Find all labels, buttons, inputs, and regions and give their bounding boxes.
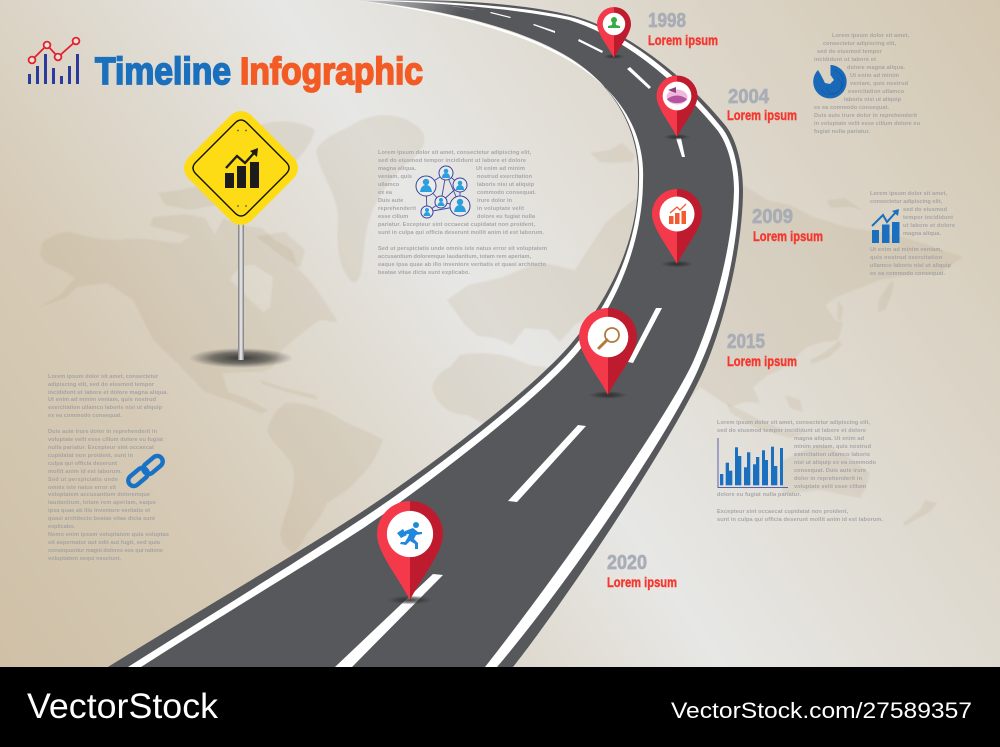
text block: top right: sed do eiusmod tempor [817, 49, 883, 55]
text block: centre: laboris nisi ut aliquip [477, 182, 535, 188]
text block: lower right: minim veniam, quis nostrud [794, 444, 872, 450]
text block: lower right: Lorem ipsum dolor sit amet, consectetur adipiscing elit, [717, 420, 870, 426]
sign shadow [189, 348, 293, 368]
text block: left: Lorem ipsum dolor sit amet, consectetur [48, 374, 159, 380]
label 2015: 2015 [727, 331, 765, 353]
text block: left: explicabo. [48, 524, 75, 530]
text block: right: consectetur adipiscing elit, [870, 199, 942, 205]
footer bar: VectorStock.com/27589357 [671, 698, 972, 723]
icon: people network [416, 166, 470, 218]
text block: lower right: sunt in culpa qui officia deserunt mollit anim id est laborum. [717, 517, 883, 523]
text block: right: Ut enim ad minim veniam, [870, 247, 942, 253]
text block: left: consequuntur magni dolores eos qui ratione [48, 548, 163, 554]
map: north america [40, 214, 338, 414]
text block: right: ut labore et dolore [903, 223, 955, 229]
road surface [108, 0, 743, 667]
text block: centre: nostrud exercitation [477, 174, 533, 180]
text block: top right: fugiat nulla pariatur. [814, 129, 870, 135]
pin 2009 [652, 189, 702, 268]
text block: lower right: sed do eiusmod tempor incididunt ut labore et dolore [717, 428, 866, 434]
text block: left: exercitation ullamco laboris nisi ut aliquip [48, 405, 163, 411]
text block: centre [378, 150, 547, 276]
label 2004: Lorem ipsum [727, 107, 797, 123]
text block: left: Sed ut perspiciatis unde [48, 477, 118, 483]
title: Timeline [95, 51, 231, 93]
text block: centre: ullamco [378, 182, 400, 188]
road right edge line [352, 0, 739, 667]
label 2009: Lorem ipsum [753, 228, 823, 244]
text block: centre: pariatur. Excepteur sint occaecat cupidatat non proident, [378, 222, 535, 228]
text block: top right: dolore magna aliqua. [847, 65, 905, 71]
text block: left: voluptatem accusantium doloremque [48, 492, 150, 498]
text block: top right: ex ea commodo consequat. [814, 105, 889, 111]
text block: right: Lorem ipsum dolor sit amet, [870, 191, 947, 197]
text block: left: Ut enim ad minim veniam, quis nostrud [48, 397, 157, 403]
text block: left: nulla pariatur. Excepteur sint occaecat [48, 445, 154, 451]
text block: centre: Ut enim ad minim [476, 166, 525, 172]
sign board [184, 111, 298, 225]
road [108, 0, 743, 667]
text block: centre: Sed ut perspiciatis unde omnis iste natus error sit voluptatem [378, 246, 547, 252]
icon: donut chart [813, 65, 847, 98]
pin 2015 [579, 308, 637, 399]
text block: left: culpa qui officia deserunt [48, 461, 117, 467]
text block: left: ipsa quae ab illo inventore veritatis et [48, 508, 150, 514]
logo: chart with line [28, 38, 79, 84]
text block: top right: veniam, quis nostrud [850, 81, 909, 87]
text block: centre: accusantium doloremque laudantium, totam rem aperiam, [378, 254, 531, 260]
icon: running businessman [397, 522, 422, 549]
pin 1998 [597, 7, 631, 59]
text block: right: sed do eiusmod [903, 207, 948, 213]
text block: right: magna aliqua. [903, 231, 941, 237]
text block: left: omnis iste natus error sit [48, 485, 116, 491]
map: scandinavia [590, 143, 635, 163]
text block: left: Nemo enim ipsam voluptatem quia voluptas [48, 532, 169, 538]
text block: left: voluptate velit esse cillum dolore eu fugiat [48, 437, 163, 443]
text block: top right: exercitation ullamco [848, 89, 905, 95]
label 2020: Lorem ipsum [607, 574, 677, 590]
text block: right [870, 191, 955, 277]
label 2015 [727, 331, 797, 369]
text block: right: ex ea commodo consequat. [870, 271, 945, 277]
text block: top right: Lorem ipsum dolor sit amet, [832, 33, 909, 39]
text block: top right: consectetur adipiscing elit, [823, 41, 896, 47]
road centre dashes [335, 6, 685, 667]
map: arctic islands [158, 121, 315, 268]
text block: left: voluptatem sequi nesciunt. [48, 556, 121, 562]
map: south america [267, 403, 383, 553]
label 2009: 2009 [752, 206, 793, 228]
road sign [184, 111, 298, 368]
text block: left: mollit anim id est laborum. [48, 469, 122, 475]
text block: centre: ex ea [378, 190, 393, 196]
text block: centre: irure dolor in [477, 198, 513, 204]
text block: left: sit aspernatur aut odit aut fugit, sed quia [48, 540, 161, 546]
text block: centre: in voluptate velit [477, 206, 524, 212]
text block: right: tempor incididunt [903, 215, 953, 221]
map: australia [780, 445, 870, 498]
map: pacific islands [727, 198, 863, 438]
text block: centre: Lorem ipsum dolor sit amet, consectetur adipiscing elit, [378, 150, 531, 156]
footer bar: VectorStock [27, 687, 219, 726]
text block: centre: commodo consequat. [477, 190, 536, 196]
text block: centre: beatae vitae dicta sunt explicabo. [378, 270, 470, 276]
text block: left: ex ea commodo consequat. [48, 413, 122, 419]
icon: chain link [126, 454, 165, 488]
text block: centre: dolore eu fugiat nulla [477, 214, 536, 220]
text block: lower right: dolor in reprehenderit in [794, 476, 863, 482]
text block: top right: incididunt ut labore et [814, 57, 876, 63]
sign pole [238, 224, 244, 360]
text block: left: adipiscing elit, sed do eiusmod tempor [48, 382, 155, 388]
label 1998 [648, 10, 718, 48]
text block: lower right: dolore eu fugiat nulla pariatur. [717, 492, 801, 498]
map: caribbean [260, 380, 318, 400]
text block: centre: magna aliqua. [378, 166, 416, 172]
icon: orange chart [669, 204, 686, 224]
map: new zealand [903, 500, 937, 526]
map: africa [432, 353, 590, 440]
text block: centre: esse cillum [378, 214, 408, 220]
text block: left [48, 374, 169, 562]
label 2004 [727, 86, 797, 123]
icon: blue growth chart [872, 209, 900, 243]
text block: centre: reprehenderit [378, 206, 416, 212]
text block: left: incididunt ut labore et dolore magna aliqua. [48, 390, 168, 396]
map: kamchatka and japan [810, 280, 893, 364]
text block: left: quasi architecto beatae vitae dicta sunt [48, 516, 155, 522]
label 2009 [752, 206, 823, 244]
text block: top right: Ut enim ad minim [850, 73, 899, 79]
icon: magnifier [599, 328, 619, 348]
text block: centre: Duis aute [378, 198, 403, 204]
text block: lower right: consequat. Duis aute irure [794, 468, 866, 474]
pin 2004 [656, 76, 698, 140]
label 2020 [607, 552, 677, 590]
text block: centre: veniam, quis [378, 174, 412, 180]
text block: left: laudantium, totam rem aperiam, eaque [48, 500, 156, 506]
text block: right: ullamco laboris nisi ut aliquip [870, 263, 952, 269]
text block: centre: sunt in culpa qui officia deserunt mollit anim id est laborum. [378, 230, 544, 236]
text block: lower right: nisi ut aliquip ex ea commodo [794, 460, 877, 466]
text block: left: Duis aute irure dolor in reprehenderit in [48, 429, 158, 435]
icon: pie chart [666, 87, 688, 104]
label 2020: 2020 [607, 552, 647, 574]
label 2015: Lorem ipsum [727, 353, 797, 369]
label 1998: 1998 [648, 10, 686, 32]
text block: top right [814, 33, 921, 135]
text block: lower right: Excepteur sint occaecat cupidatat non proident, [717, 509, 848, 515]
text block: lower right: magna aliqua. Ut enim ad [794, 436, 865, 442]
world map [40, 115, 963, 553]
text block: centre: sed do eiusmod tempor incididunt ut labore et dolore [378, 158, 526, 164]
text block: top right: in voluptate velit esse cillum dolore eu [814, 121, 921, 127]
bar chart [718, 438, 788, 488]
road left edge line [128, 0, 643, 667]
text block: right: quis nostrud exercitation [870, 255, 943, 261]
text block: lower right: exercitation ullamco laboris [794, 452, 870, 458]
text block: lower right: voluptate velit esse cillum [794, 484, 866, 490]
map: greenland [316, 115, 425, 282]
title [95, 51, 423, 93]
title: Infographic [240, 51, 423, 93]
text block: top right: laboris nisi ut aliquip [844, 97, 902, 103]
icon: rising chart [225, 148, 259, 188]
icon: person [608, 17, 620, 28]
text block: top right: Duis aute irure dolor in reprehenderit [814, 113, 917, 119]
map: asia [640, 170, 963, 430]
map: europe [447, 195, 640, 345]
text block: left: cupidatat non proident, sunt in [48, 453, 134, 459]
text block: lower right [717, 420, 883, 523]
text block: centre: eaque ipsa quae ab illo inventore veritatis et quasi architecto [378, 262, 547, 268]
label 2004: 2004 [728, 86, 770, 108]
footer bar [0, 667, 1000, 747]
label 1998: Lorem ipsum [648, 32, 718, 48]
pin 2020 [377, 501, 443, 604]
